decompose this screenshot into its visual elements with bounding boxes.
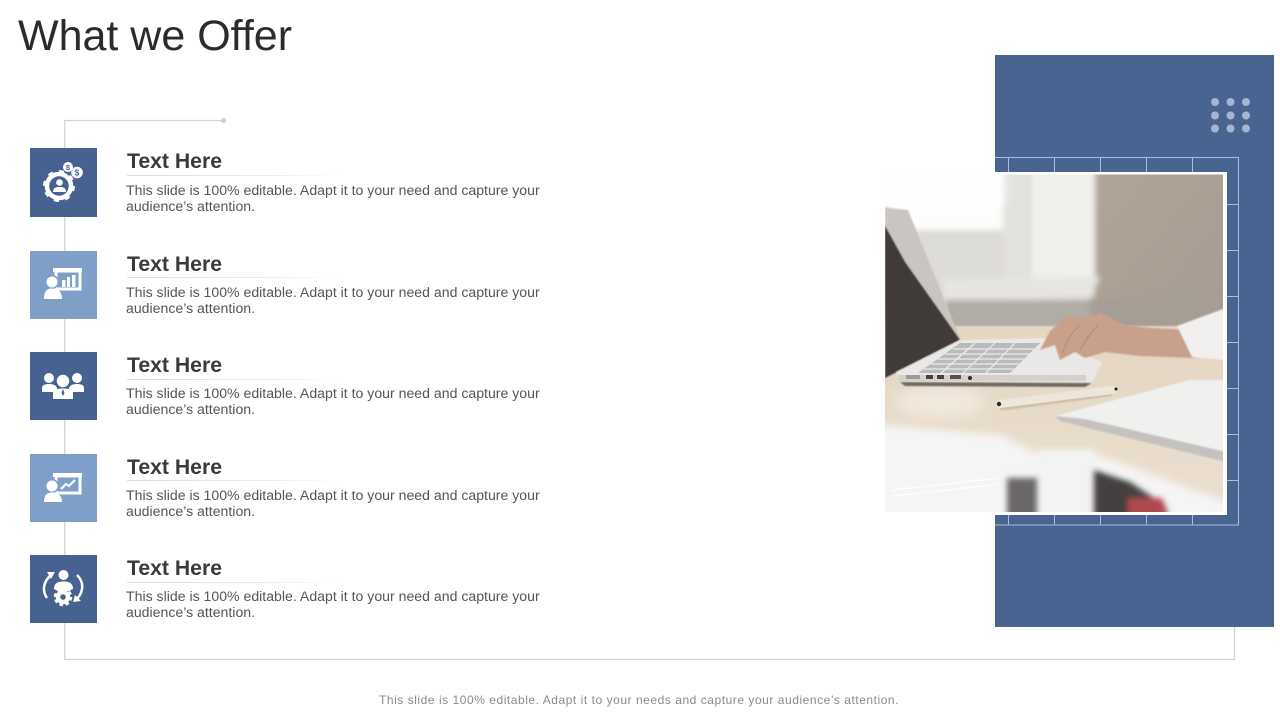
description 2 <box>126 284 540 316</box>
description 2: audience’s attention. <box>126 300 255 316</box>
icon: gear with person and dollar coins: $ <box>66 163 71 172</box>
heading 3: Text Here <box>127 354 222 377</box>
description 5: This slide is 100% editable. Adapt it to your need and capture your <box>126 588 540 604</box>
photo: hands on laptop at desk <box>885 172 1227 515</box>
description 3 <box>126 385 540 417</box>
description 4: audience’s attention. <box>126 503 255 519</box>
laptop <box>885 206 960 338</box>
icon: gear with person and dollar coins: $ <box>75 168 80 178</box>
description 4 <box>126 487 540 519</box>
icon: presenter with line chart <box>30 454 97 522</box>
item 1 <box>30 148 540 217</box>
item 5 <box>30 555 540 623</box>
description 1: This slide is 100% editable. Adapt it to your need and capture your <box>126 182 540 198</box>
item 2 <box>30 251 540 319</box>
item 3 <box>30 352 540 420</box>
description 3: This slide is 100% editable. Adapt it to your need and capture your <box>126 385 540 401</box>
description 1 <box>126 182 540 214</box>
description 2: This slide is 100% editable. Adapt it to your need and capture your <box>126 284 540 300</box>
heading 5: Text Here <box>127 557 222 580</box>
panel: blue backdrop <box>995 55 1274 627</box>
description 5 <box>126 588 540 620</box>
icon: gear with person and dollar coins <box>30 148 97 217</box>
pen <box>1000 394 1112 409</box>
description 4: This slide is 100% editable. Adapt it to your need and capture your <box>126 487 540 503</box>
title: What we Offer <box>18 12 292 60</box>
dot pattern <box>1211 98 1250 132</box>
icon: presenter with bar chart <box>30 251 97 319</box>
papers <box>1056 380 1223 452</box>
icon: team of three people <box>30 352 97 420</box>
icon: person, gear and cycle arrows <box>30 555 97 623</box>
window fade <box>1004 182 1008 196</box>
heading 4: Text Here <box>127 456 222 479</box>
footer note: This slide is 100% editable. Adapt it to your needs and capture your audience’s attention. <box>379 693 899 707</box>
hand <box>1040 313 1195 360</box>
heading 1: Text Here <box>127 150 222 173</box>
item 4 <box>30 454 540 522</box>
heading 2: Text Here <box>127 253 222 276</box>
description 3: audience’s attention. <box>126 401 255 417</box>
description 1: audience’s attention. <box>126 198 255 214</box>
grid lines <box>995 157 1239 526</box>
blurred foreground <box>885 422 1223 512</box>
description 5: audience’s attention. <box>126 604 255 620</box>
